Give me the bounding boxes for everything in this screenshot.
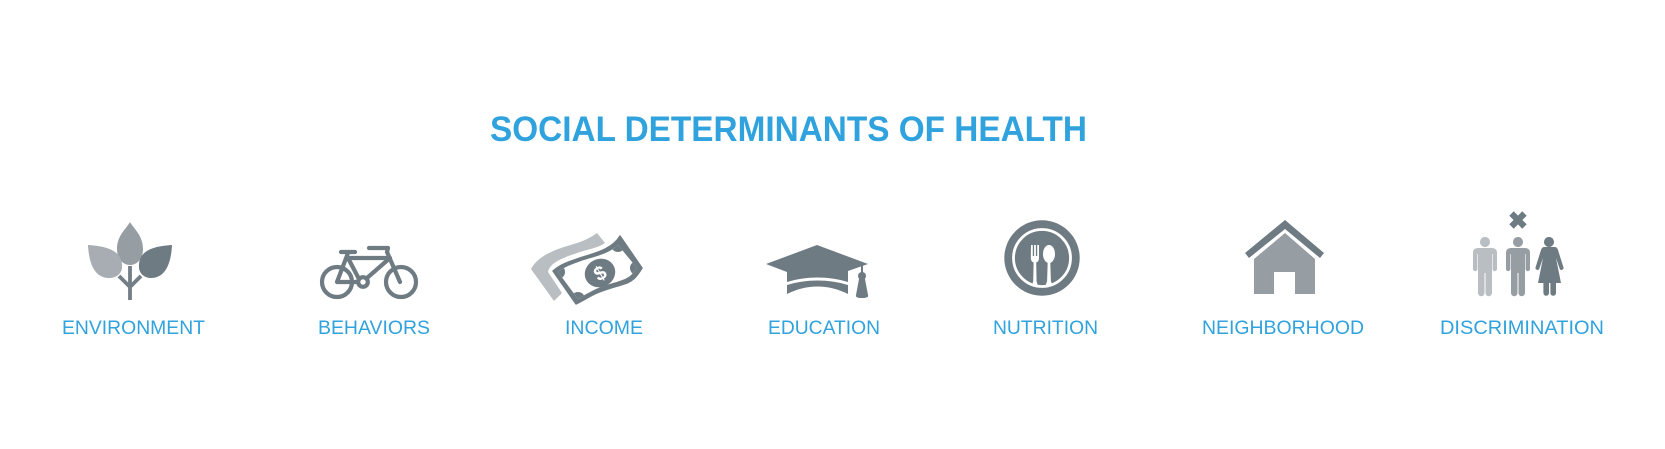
icon: cross mark [1512,214,1524,226]
icon: man light [1473,237,1497,296]
panel: environment [62,222,205,339]
label: discrimination: DISCRIMINATION [1440,317,1604,339]
panel: income [531,233,644,339]
label: education: EDUCATION [768,317,880,339]
label: environment: ENVIRONMENT [62,317,205,339]
panel: neighborhood [1202,220,1364,339]
icon: woman [1535,237,1564,296]
icon: man dark [1506,237,1530,296]
icon: house [1245,220,1324,294]
label: behaviors: BEHAVIORS [318,317,430,339]
label: income: INCOME [565,317,643,339]
icon: plate with fork and spoon [1004,220,1080,296]
label: neighborhood: NEIGHBORHOOD [1202,317,1364,339]
panel: education [766,245,880,339]
label: nutrition: NUTRITION [993,317,1098,339]
panel: discrimination [1440,214,1604,339]
title: SOCIAL DETERMINANTS OF HEALTH [490,109,1087,149]
icon: bicycle [322,248,416,297]
panel: behaviors [318,248,430,339]
panel: nutrition [993,220,1098,339]
icon: money: $ [590,262,611,286]
infographic [64,116,1602,334]
icon: plant [88,222,172,300]
icon: graduation cap [766,245,868,298]
